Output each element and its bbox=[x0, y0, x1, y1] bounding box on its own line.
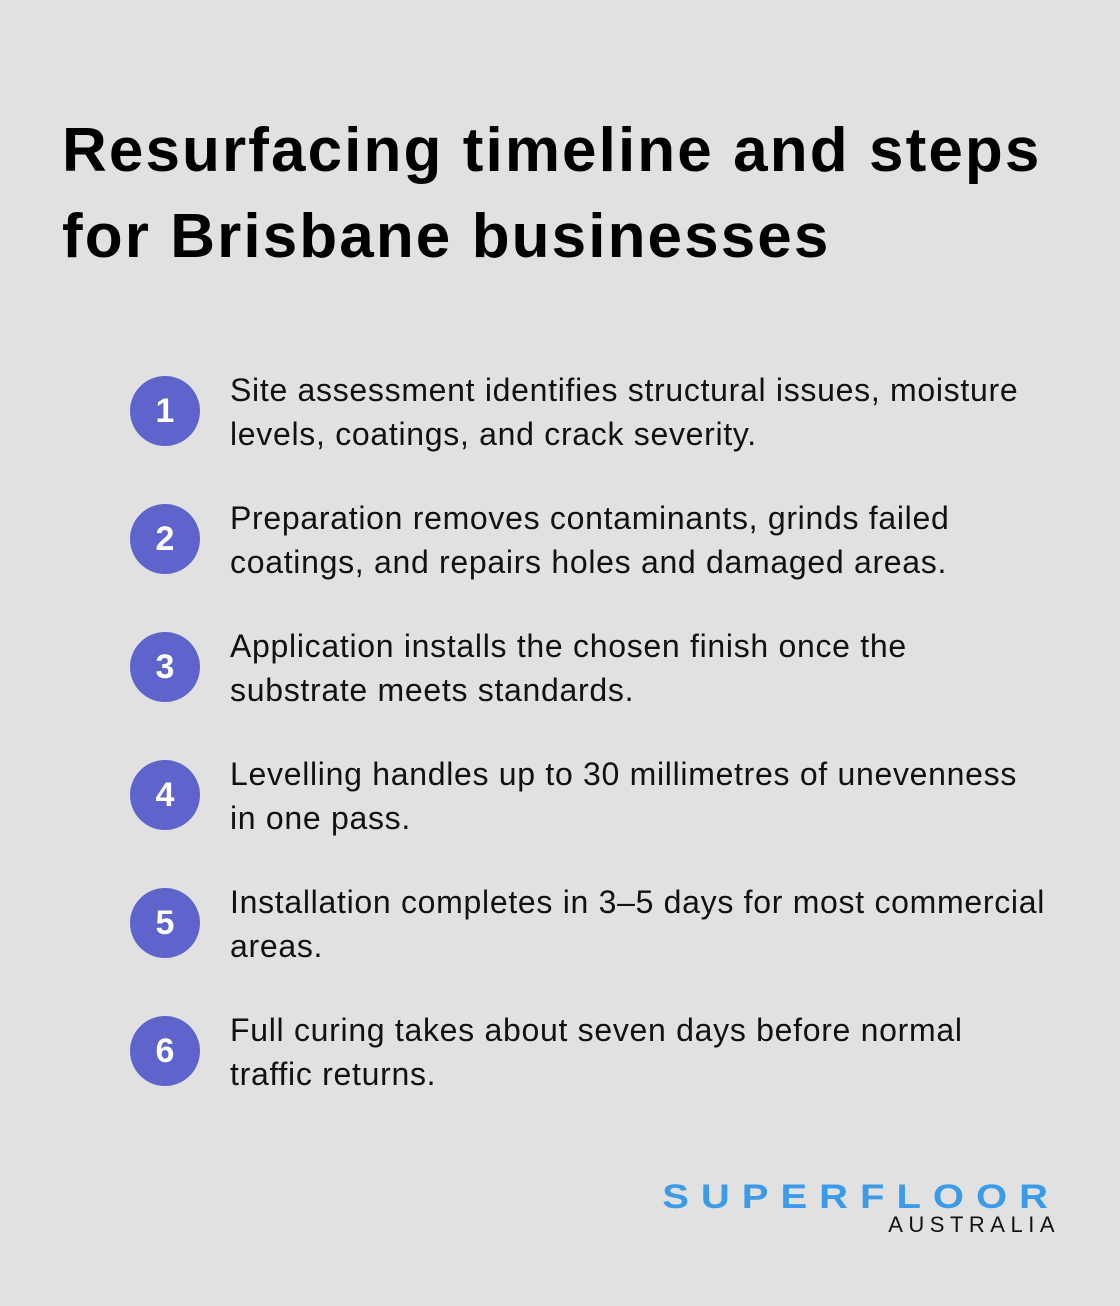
text 4 bbox=[230, 756, 1017, 836]
logo bbox=[662, 1178, 1060, 1237]
number 5: 5 bbox=[156, 904, 174, 942]
text 3 bbox=[230, 628, 907, 708]
number 4 bbox=[130, 760, 200, 830]
text 1: Site assessment identifies structural issues, moisture bbox=[230, 372, 1018, 408]
text 1: levels, coatings, and crack severity. bbox=[230, 416, 757, 452]
number 3 bbox=[130, 632, 200, 702]
text 1 bbox=[230, 372, 1018, 452]
text 6: traffic returns. bbox=[230, 1056, 436, 1092]
text 2 bbox=[230, 500, 949, 580]
number 6: 6 bbox=[156, 1032, 174, 1070]
step 6 bbox=[130, 1012, 963, 1092]
title bbox=[62, 116, 1041, 271]
text 5: Installation completes in 3–5 days for most commercial bbox=[230, 884, 1045, 920]
number 1 bbox=[130, 376, 200, 446]
text 2: Preparation removes contaminants, grinds failed bbox=[230, 500, 949, 536]
step 4 bbox=[130, 756, 1017, 836]
number 4: 4 bbox=[156, 776, 174, 814]
number 2 bbox=[130, 504, 200, 574]
text 6: Full curing takes about seven days before normal bbox=[230, 1012, 963, 1048]
step 5 bbox=[130, 884, 1045, 964]
step 2 bbox=[130, 500, 949, 580]
text 4: in one pass. bbox=[230, 800, 411, 836]
title: Resurfacing timeline and steps bbox=[62, 116, 1041, 185]
text 6 bbox=[230, 1012, 963, 1092]
text 5 bbox=[230, 884, 1045, 964]
logo: AUSTRALIA bbox=[888, 1212, 1060, 1237]
text 3: substrate meets standards. bbox=[230, 672, 634, 708]
number 2: 2 bbox=[156, 520, 174, 558]
number 6 bbox=[130, 1016, 200, 1086]
logo: SUPERFLOOR bbox=[662, 1178, 1060, 1216]
number 1: 1 bbox=[156, 392, 174, 430]
text 3: Application installs the chosen finish once the bbox=[230, 628, 907, 664]
title: for Brisbane businesses bbox=[62, 202, 830, 271]
text 4: Levelling handles up to 30 millimetres of unevenness bbox=[230, 756, 1017, 792]
number 3: 3 bbox=[156, 648, 174, 686]
step 1 bbox=[130, 372, 1018, 452]
text 2: coatings, and repairs holes and damaged areas. bbox=[230, 544, 947, 580]
step 3 bbox=[130, 628, 907, 708]
number 5 bbox=[130, 888, 200, 958]
text 5: areas. bbox=[230, 928, 323, 964]
